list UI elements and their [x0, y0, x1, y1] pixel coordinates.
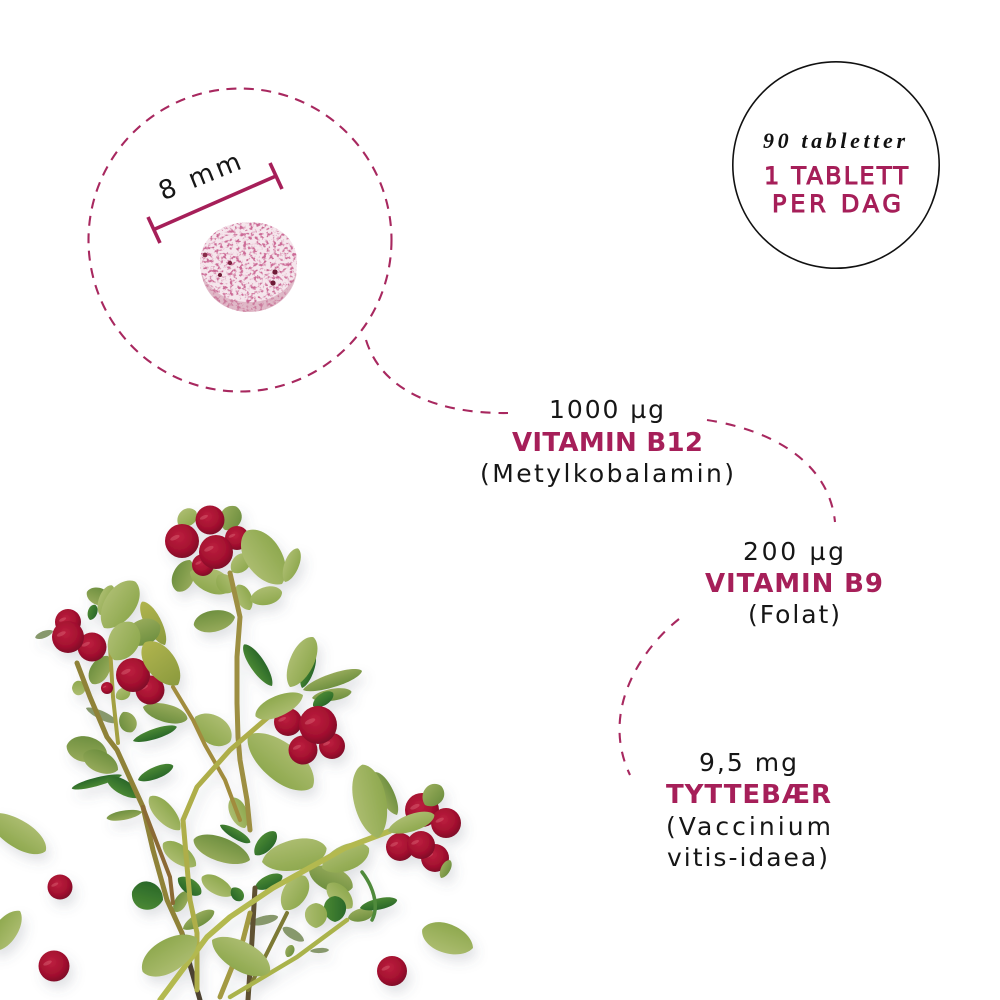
icon: tablet — [198, 220, 299, 314]
badge: 90 tabletter, 1 tablett per dag — [733, 62, 939, 268]
badge: 90 tabletter, 1 tablett per dag: 90 tabletter — [763, 128, 905, 153]
front leaves — [100, 521, 454, 986]
text block: tyttebær: 9,5 mg — [699, 748, 797, 777]
text block: vitamin B9: VITAMIN B9 — [705, 569, 883, 599]
ruler: tablet diameter — [148, 163, 282, 243]
fallen leaves and berries — [0, 803, 478, 986]
text block: vitamin B12: VITAMIN B12 — [512, 428, 703, 458]
text block: tyttebær: vitis-idaea) — [667, 843, 828, 872]
stems — [77, 573, 390, 1000]
dashed connector: circle to vitamin B12 — [366, 340, 508, 413]
dashed connector: vitamin B9 to tyttebær — [620, 619, 679, 775]
berries: middle cluster — [274, 706, 345, 764]
back leaves — [34, 502, 404, 959]
text block: vitamin B9 — [705, 537, 883, 629]
text block: vitamin B12 — [480, 395, 734, 488]
text block: vitamin B12: 1000 µg — [549, 395, 664, 424]
text block: tyttebær — [666, 748, 831, 872]
text block: vitamin B9: (Folat) — [748, 600, 840, 629]
dashed circle around tablet — [88, 88, 392, 392]
text block: vitamin B9: 200 µg — [743, 537, 844, 566]
text block: tyttebær: TYTTEBÆR — [666, 780, 831, 810]
berries: left cluster — [52, 609, 164, 704]
text block: tyttebær: (Vaccinium — [666, 812, 831, 841]
badge: 90 tabletter, 1 tablett per dag: PER DAG — [772, 190, 901, 218]
badge: 90 tabletter, 1 tablett per dag: 1 TABLETT — [764, 162, 908, 190]
berries: right cluster — [386, 793, 461, 872]
size label: 8 mm: 8 mm — [155, 147, 245, 207]
illustration: lingonberry sprig — [34, 502, 461, 1000]
dashed connector: vitamin B12 to vitamin B9 — [707, 420, 835, 522]
berries: top cluster — [165, 506, 249, 576]
text block: vitamin B12: (Metylkobalamin) — [480, 459, 734, 488]
